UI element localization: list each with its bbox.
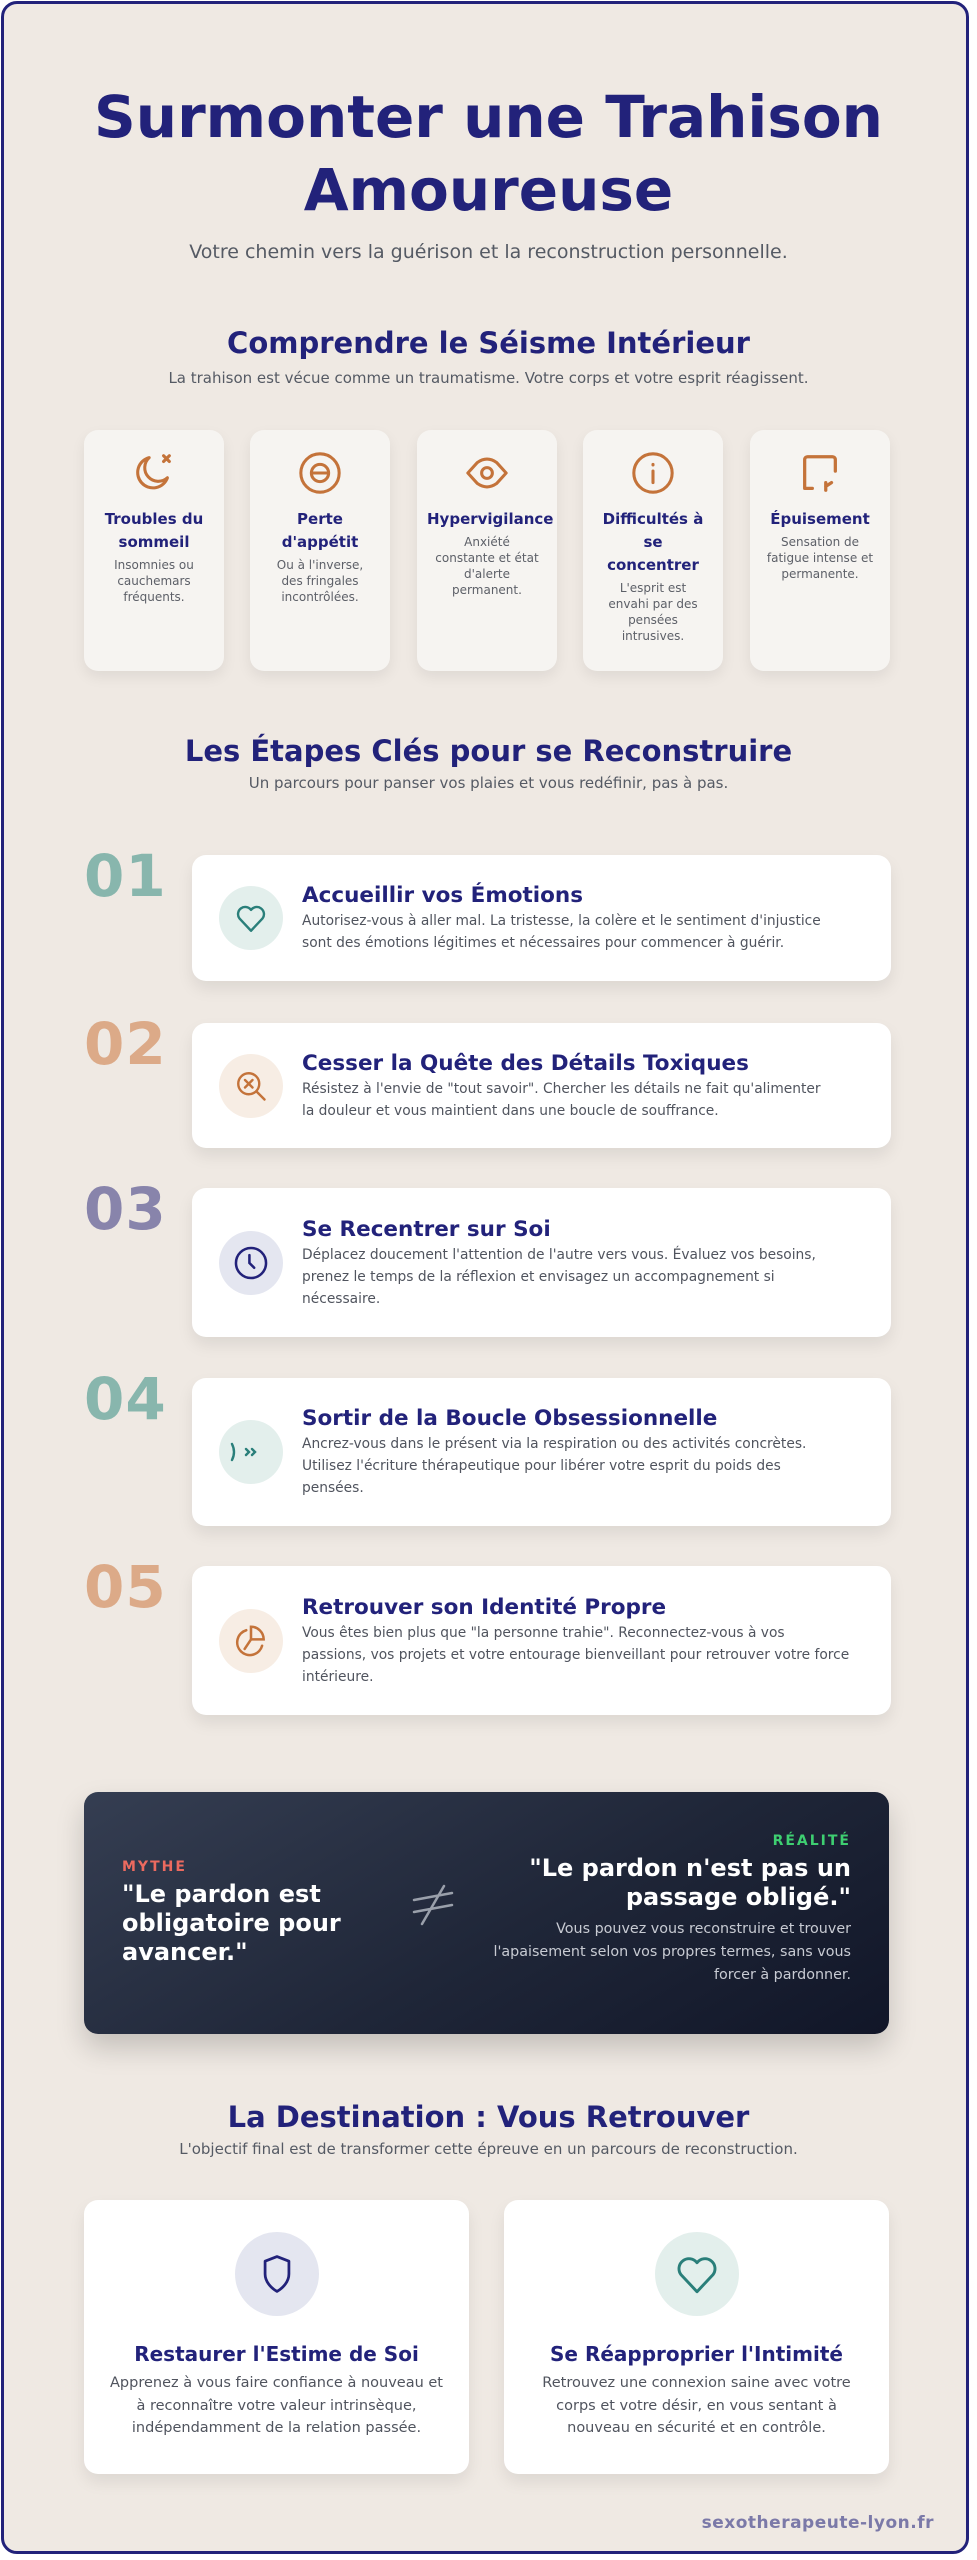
step card 1: Autorisez-vous à aller mal. La tristesse, la colère et le sentiment d'injustice sont des émotions légitimes et nécessaires pour commencer à guérir.	[302, 913, 821, 951]
step card 5: Vous êtes bien plus que "la personne trahie". Reconnectez-vous à vos passions, vos projets et votre entourage bienveillant pour retrouver votre force intérieure.	[302, 1624, 849, 1684]
mythe block: MYTHE	[122, 1859, 187, 1875]
step card 4: Ancrez-vous dans le présent via la respiration ou des activités concrètes. Utilisez l'écriture thérapeutique pour libérer votre esprit du poids des	[302, 1436, 806, 1474]
réalité block: "Le pardon n'est pas un	[529, 1854, 851, 1882]
step number 04: 04	[84, 1365, 167, 1433]
icon: heart	[219, 886, 283, 950]
section heading: destination: La Destination : Vous Retrouver	[228, 2100, 749, 2134]
section heading: étapes: Les Étapes Clés pour se Reconstruire	[185, 734, 792, 768]
icon: battery frame	[803, 455, 837, 492]
section subtitle: comprendre: La trahison est vécue comme un traumatisme. Votre corps et votre esprit réagissent.	[168, 369, 809, 387]
step card 5	[192, 1566, 891, 1715]
section subtitle: étapes: Un parcours pour panser vos plaies et vous redéfinir, pas à pas.	[249, 774, 728, 792]
step card 4: pensées.	[302, 1480, 364, 1496]
step card 5: Retrouver son Identité Propre	[302, 1594, 666, 1620]
icon: shield	[234, 2232, 318, 2316]
panel: estime de soi: Apprenez à vous faire confiance à nouveau et à reconnaître votre valeur intrinsèque, indépendamment de la relation passée.	[110, 2375, 443, 2436]
step card 1: Accueillir vos Émotions	[302, 883, 583, 908]
icon: pie	[219, 1608, 283, 1672]
panel: symptom card hypervigilance: Hypervigilance	[427, 510, 553, 528]
icon: eye	[466, 458, 508, 488]
step number 01: 01	[84, 842, 167, 910]
panel: symptom card épuisement	[750, 430, 890, 671]
panel: symptom card concentration	[583, 430, 723, 671]
panel: symptom card appétit	[250, 430, 390, 671]
step card 2: Cesser la Quête des Détails Toxiques	[302, 1050, 749, 1076]
panel: intimité: Se Réapproprier l'Intimité	[550, 2342, 843, 2366]
step card 3	[192, 1188, 891, 1337]
title: Amoureuse	[304, 156, 673, 224]
panel: symptom card épuisement: Sensation de fatigue intense et permanente.	[767, 535, 873, 581]
panel: mythe vs réalité	[84, 1792, 889, 2034]
step card 2	[192, 1023, 891, 1148]
title	[94, 83, 883, 224]
step card 4	[192, 1378, 891, 1526]
mythe block: "Le pardon est obligatoire pour avancer."	[122, 1880, 341, 1966]
réalité block	[493, 1832, 851, 1983]
panel: intimité: Retrouvez une connexion saine avec votre corps et votre désir, en vous sentant à nouveau en sécurité et en contrôle.	[542, 2375, 851, 2436]
step number 05: 05	[84, 1553, 167, 1621]
panel: symptom card concentration: concentrer	[607, 556, 699, 574]
panel: estime de soi	[84, 2200, 469, 2474]
panel: symptom card sommeil	[84, 430, 224, 671]
panel: symptom card concentration: L'esprit est envahi par des pensées intrusives.	[608, 581, 698, 643]
réalité block: passage obligé."	[626, 1883, 851, 1911]
panel: symptom card hypervigilance	[417, 430, 557, 671]
icon: heart	[654, 2232, 738, 2316]
icon: not equal	[412, 1884, 454, 1926]
réalité block: RÉALITÉ	[773, 1833, 851, 1849]
panel: symptom card appétit: Ou à l'inverse, des fringales incontrôlées.	[277, 558, 363, 604]
step card 1	[192, 855, 891, 981]
icon: search x	[219, 1054, 283, 1118]
panel: symptom card sommeil: Insomnies ou cauchemars fréquents.	[114, 558, 194, 604]
icon: chevrons	[219, 1420, 283, 1484]
panel: symptom card hypervigilance: Anxiété constante et état d'alerte permanent.	[435, 535, 539, 597]
step card 2: la douleur et vous maintient dans une boucle de souffrance.	[302, 1102, 719, 1118]
step card 4: Sortir de la Boucle Obsessionnelle	[302, 1406, 717, 1431]
step card 3: Déplacez doucement l'attention de l'autre vers vous. Évaluez vos besoins, prenez le temps de la réflexion et envisagez un accompagnement si nécessaire.	[302, 1246, 816, 1306]
icon: info	[632, 452, 674, 494]
title: Surmonter une Trahison	[94, 83, 883, 151]
panel: symptom card concentration: se	[643, 533, 663, 551]
section subtitle: destination: L'objectif final est de transformer cette épreuve en un parcours de reconstruction.	[179, 2140, 798, 2158]
panel: symptom card sommeil: Troubles du sommeil	[105, 510, 203, 551]
footer url: sexotherapeute-lyon.fr	[702, 2513, 934, 2533]
panel: intimité	[504, 2200, 889, 2474]
panel: symptom card appétit: Perte d'appétit	[282, 510, 358, 551]
panel: estime de soi: Restaurer l'Estime de Soi	[134, 2342, 419, 2366]
step number 03: 03	[84, 1175, 167, 1243]
step card 3: Se Recentrer sur Soi	[302, 1216, 551, 1242]
step card 2: Résistez à l'envie de "tout savoir". Chercher les détails ne fait qu'alimenter	[302, 1080, 821, 1096]
icon: circle minus	[299, 452, 341, 494]
subtitle: Votre chemin vers la guérison et la reconstruction personnelle.	[189, 241, 788, 263]
panel: symptom card concentration: Difficultés à	[603, 510, 703, 528]
panel: symptom card épuisement: Épuisement	[770, 510, 870, 528]
step number 02: 02	[84, 1010, 167, 1078]
icon: moon	[136, 454, 171, 490]
réalité block: Vous pouvez vous reconstruire et trouver l'apaisement selon vos propres termes, sans vous forcer à pardonner.	[493, 1921, 851, 1983]
icon: clock	[219, 1230, 283, 1294]
section heading: comprendre: Comprendre le Séisme Intérieur	[227, 326, 750, 360]
